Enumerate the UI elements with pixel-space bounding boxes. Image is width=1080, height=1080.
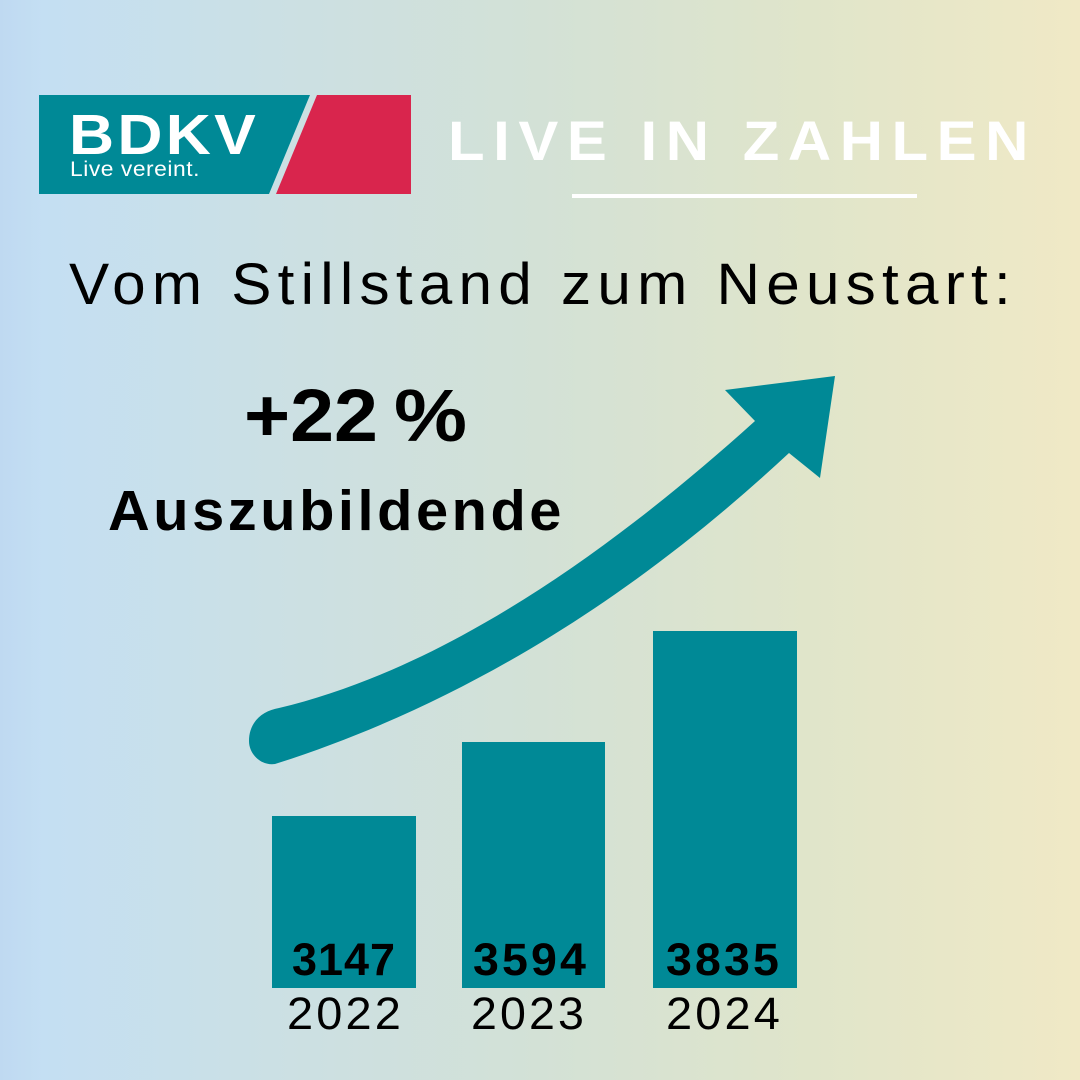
bar: 2023 bbox=[462, 742, 605, 1039]
key figure: +22 % Auszubildende bbox=[108, 374, 565, 543]
heading: Live in Zahlen bbox=[448, 109, 1037, 198]
logo: BDKV: Live vereint. bbox=[70, 158, 200, 181]
key figure: +22 % Auszubildende: % bbox=[394, 374, 467, 457]
bar: 2022 bbox=[272, 816, 416, 1039]
key figure: +22 % Auszubildende: Auszubildende bbox=[108, 479, 565, 543]
bar: 2022: 2022 bbox=[287, 988, 404, 1039]
bar: 2024: 2024 bbox=[666, 988, 783, 1039]
bar: 2024: 3835 bbox=[666, 934, 782, 985]
bar: 2024 bbox=[653, 631, 797, 1039]
subtitle: Vom Stillstand zum Neustart: bbox=[69, 252, 1017, 317]
heading: Live in Zahlen: LIVE IN ZAHLEN bbox=[448, 109, 1037, 172]
bar chart bbox=[272, 631, 797, 1039]
bar: 2022: 3147 bbox=[292, 934, 396, 985]
key figure: +22 % Auszubildende: +22 bbox=[244, 374, 378, 457]
logo: BDKV bbox=[39, 95, 411, 194]
bar: 2023: 2023 bbox=[471, 988, 587, 1039]
bar: 2023: 3594 bbox=[473, 934, 589, 985]
logo: BDKV: BDKV bbox=[69, 103, 259, 167]
growth arrow bbox=[249, 376, 835, 764]
